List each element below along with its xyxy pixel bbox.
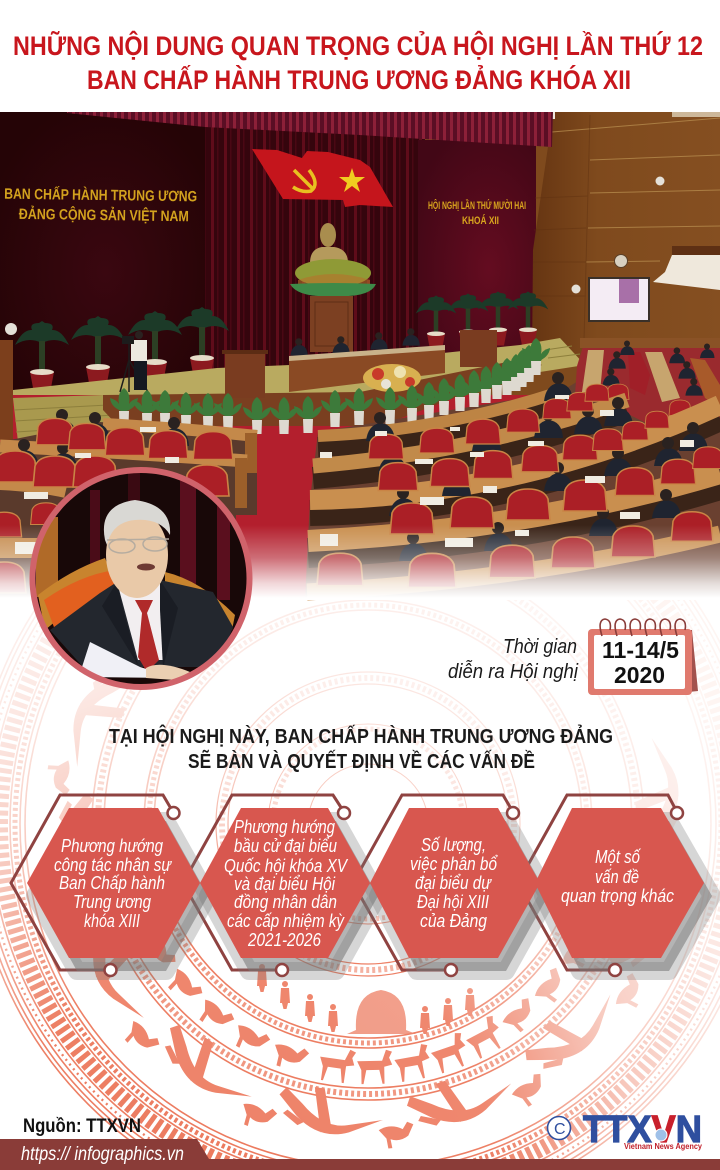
panel: hexagon 2: [200, 808, 378, 971]
footer bar with url: [0, 1139, 720, 1170]
photo fade to white: [0, 525, 720, 598]
title: [13, 29, 703, 95]
cameraman: [120, 331, 148, 392]
panel: hexagon 4: vấn đề: [595, 867, 639, 887]
panel: hexagon 2: đồng nhân dân: [234, 892, 337, 912]
panel: hexagon 2: các cấp nhiệm kỳ: [227, 911, 345, 931]
screen, clock, cameras, awning: [5, 176, 720, 335]
panel: hexagon 1: công tác nhân sự: [54, 855, 172, 875]
panel: hexagon 1: Ban Chấp hành: [59, 873, 165, 893]
wall text left: ĐẢNG CỘNG SẢN VIỆT NAM: [19, 205, 189, 225]
right delegate rows: [307, 372, 720, 592]
panel: hexagon 1: [27, 808, 208, 971]
section heading: [109, 724, 613, 773]
panel: hexagon 4: Một số: [595, 847, 642, 867]
hero photo: party plenum hall: [0, 112, 720, 600]
stage floor and steps: [13, 338, 585, 410]
panel: hexagon 3: [370, 808, 548, 971]
logo: TTXVN: Vietnam News Agency: [624, 1142, 703, 1151]
panel: hexagon 2: Quốc hội khóa XV: [224, 856, 349, 876]
wall text right: HỘI NGHỊ LẦN THỨ MƯỜI HAI: [428, 199, 526, 212]
hexagon outlines with connector lines: [11, 795, 677, 970]
left delegate rows: [0, 409, 257, 593]
date label: diễn ra Hội nghị: [448, 660, 579, 683]
source text: Nguồn: TTXVN: [23, 1116, 141, 1137]
wall text right: [428, 199, 526, 227]
party flag: [252, 149, 393, 207]
far right delegate rows: [575, 338, 720, 425]
panel: hexagon 1: khóa XIII: [84, 911, 140, 931]
lecterns and presidium table: [222, 328, 497, 398]
panel: hexagon 2: 2021-2026: [247, 930, 322, 950]
panel: hexagon 3: Số lượng,: [421, 835, 486, 855]
palm plants: [15, 292, 548, 393]
carpet and audience base: [0, 340, 720, 600]
section heading: SẼ BÀN VÀ QUYẾT ĐỊNH VỀ CÁC VẤN ĐỀ: [188, 750, 535, 773]
panel: hexagon 3: của Đảng: [420, 911, 487, 931]
wall text left: [4, 186, 197, 225]
date label: [448, 636, 579, 683]
portrait of the General Secretary: [30, 467, 252, 691]
date label: Thời gian: [503, 636, 577, 658]
plant row with white pots: [110, 338, 550, 434]
bust and flower basket: [290, 223, 376, 352]
wall text right: KHOÁ XII: [462, 214, 499, 227]
panel: hexagon 2: và đại biểu Hội: [234, 874, 336, 894]
panel: hexagon 3: việc phân bổ: [410, 854, 498, 874]
panel: hexagon 4: quan trọng khác: [561, 886, 674, 906]
wall text left: BAN CHẤP HÀNH TRUNG ƯƠNG: [4, 186, 197, 205]
connector dots: [104, 807, 683, 976]
panel: hexagon 3: đại biểu dự: [415, 873, 492, 893]
section heading: TẠI HỘI NGHỊ NÀY, BAN CHẤP HÀNH TRUNG ƯƠNG ĐẢNG: [109, 724, 613, 748]
logo: TTXVN: C: [554, 1121, 566, 1138]
footer bar with url: https:// infographics.vn: [21, 1144, 184, 1165]
curtains and wall: [0, 112, 720, 412]
panel: hexagon 1: Phương hướng: [61, 836, 163, 856]
title: BAN CHẤP HÀNH TRUNG ƯƠNG ĐẢNG KHÓA XII: [87, 63, 631, 95]
panel: hexagon 1: Trung ương: [73, 892, 151, 912]
logo: TTXVN: TTXVN: [583, 1109, 702, 1151]
panel: hexagon 2: bầu cử đại biểu: [234, 836, 337, 856]
panel: hexagon 2: Phương hướng: [234, 817, 335, 837]
panel: hexagon 4: [535, 808, 712, 971]
calendar icon: 2020: [614, 662, 665, 688]
panel: hexagon 3: Đại hội XIII: [417, 892, 489, 912]
calendar icon: 11-14/5: [602, 637, 679, 663]
calendar icon: [588, 619, 698, 695]
background: bronze drum pattern: [0, 600, 720, 1159]
